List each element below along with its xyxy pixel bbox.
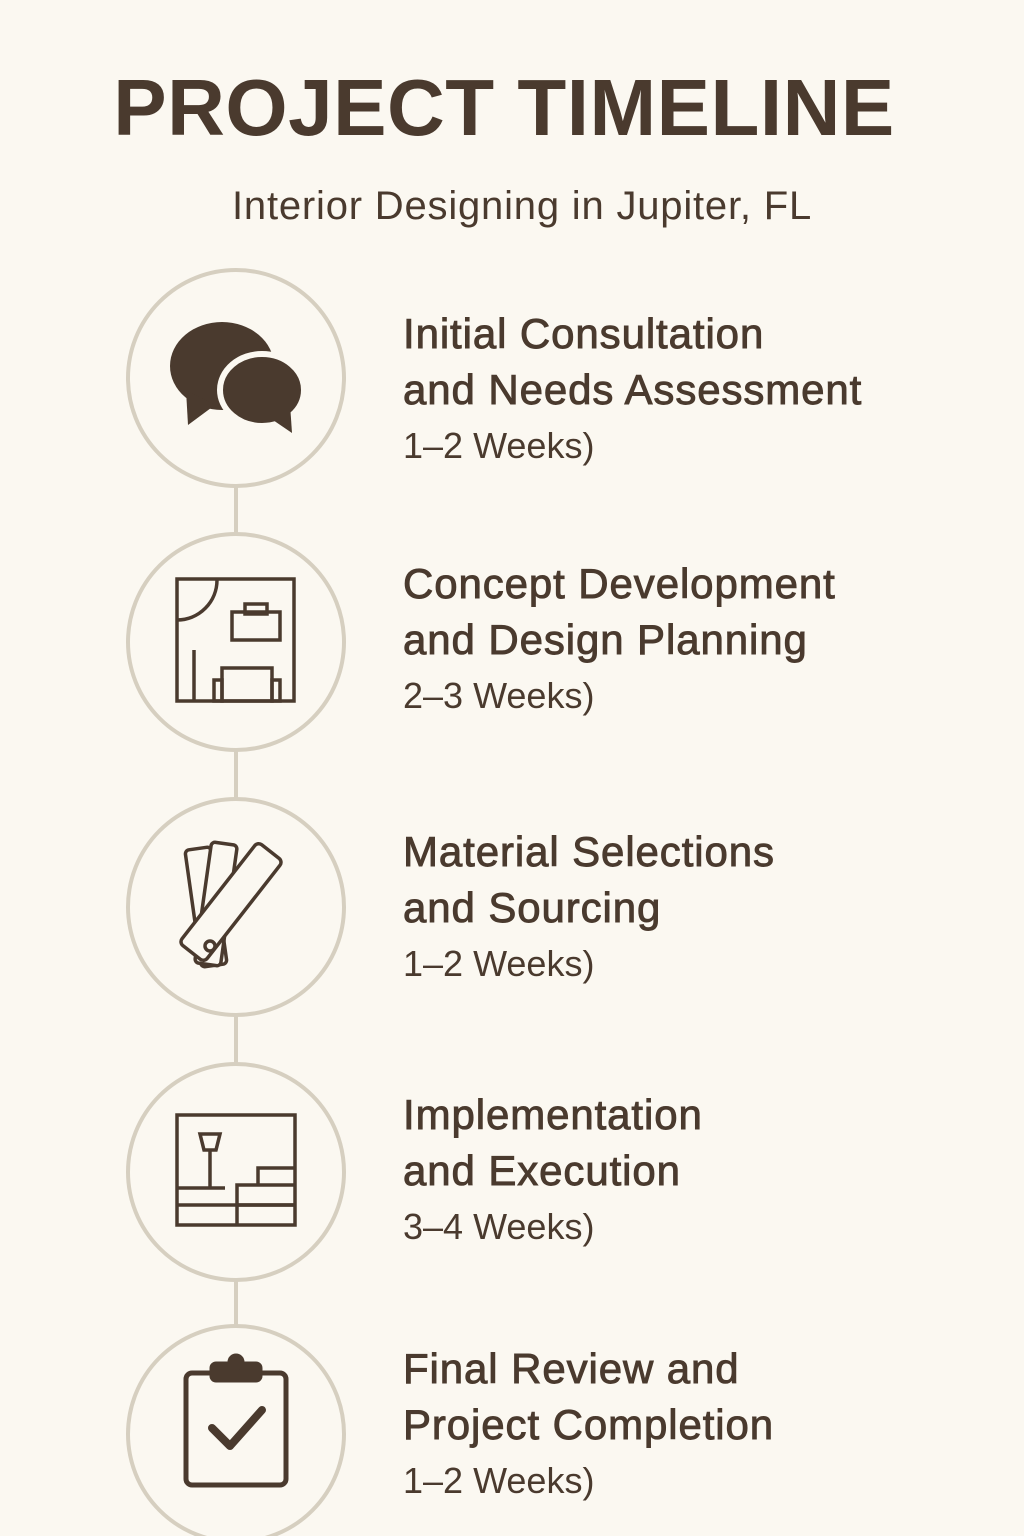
- step 4 text: Implementation: [403, 1091, 703, 1138]
- circles: [128, 270, 344, 1536]
- title: PROJECT TIMELINE: [113, 63, 895, 152]
- subtitle: Interior Designing in Jupiter, FL: [232, 184, 812, 228]
- step 3 text: Material Selections: [403, 828, 775, 875]
- step 1 text: 1–2 Weeks): [403, 425, 594, 466]
- step 5 text: [403, 1345, 774, 1501]
- icon: swatches: [179, 842, 283, 967]
- step 3 text: 1–2 Weeks): [403, 943, 594, 984]
- step 2 text: 2–3 Weeks): [403, 675, 594, 716]
- step 4 text: 3–4 Weeks): [403, 1206, 594, 1247]
- icon: clipboard check: [186, 1356, 286, 1485]
- step 1 text: [403, 310, 862, 466]
- step 5 text: Final Review and: [403, 1345, 740, 1392]
- step 4 text: and Execution: [403, 1147, 681, 1194]
- step 4 text: [403, 1091, 703, 1247]
- step 1 text: Initial Consultation: [403, 310, 764, 357]
- step 2 text: Concept Development: [403, 560, 836, 607]
- step 3 text: and Sourcing: [403, 884, 661, 931]
- connector line: [234, 486, 238, 1330]
- step 5 text: 1–2 Weeks): [403, 1460, 594, 1501]
- icon: room: [177, 1115, 295, 1225]
- icon: floor plan: [177, 579, 294, 701]
- icon: chat bubbles: [170, 322, 304, 433]
- step 2 text: and Design Planning: [403, 616, 808, 663]
- step 3 text: [403, 828, 775, 984]
- step 2 text: [403, 560, 836, 716]
- step 1 text: and Needs Assessment: [403, 366, 862, 413]
- step 5 text: Project Completion: [403, 1401, 774, 1448]
